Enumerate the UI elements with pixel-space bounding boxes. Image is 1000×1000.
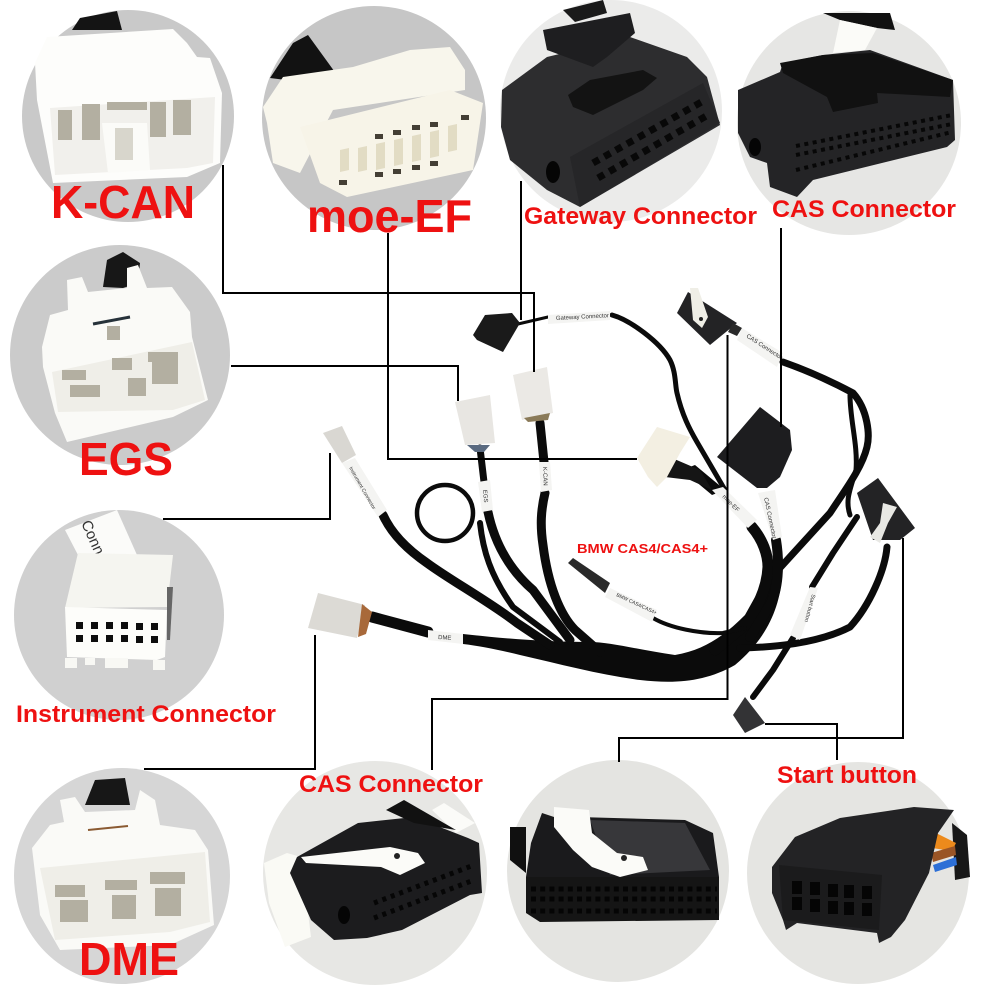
tag: BMW CAS4: BMW CAS4/CAS4+ <box>615 592 658 616</box>
wiring harness <box>308 288 915 733</box>
panel: CAS connector top <box>737 11 961 235</box>
tag: start button: Start button <box>803 593 816 623</box>
K-CAN label: K-CAN <box>51 176 195 228</box>
wire: DME <box>372 617 428 632</box>
wire: instrument <box>383 515 550 645</box>
panel: CAS connector bottom left <box>263 761 487 985</box>
EGS label: EGS <box>79 433 173 485</box>
panel: CAS connector bottom middle <box>507 760 729 982</box>
wire: CAS upper right <box>778 362 868 570</box>
wire: start button upper <box>812 517 857 587</box>
tag: BMW CAS4 <box>605 588 658 622</box>
wire: moe-EF fan <box>682 465 725 495</box>
plug: moe-EF <box>637 427 712 490</box>
wire: gateway plug tail <box>518 317 548 324</box>
tag: EGS <box>478 480 493 512</box>
Gateway Connector label: Gateway Connector <box>524 203 757 230</box>
tag: DME <box>428 630 463 644</box>
DME label: DME <box>79 933 179 985</box>
plug: start button <box>733 697 765 733</box>
tag: instrument <box>342 458 387 517</box>
tag: CAS <box>737 328 783 367</box>
tag: gateway <box>548 311 610 324</box>
wire: CAS upper right strand <box>848 395 856 515</box>
wire: gateway <box>612 315 725 490</box>
panel: moe-EF connector <box>262 6 486 242</box>
panel: Gateway connector <box>500 0 757 230</box>
wire: CAS connector <box>750 540 778 637</box>
plug: BMW CAS4 barrel <box>568 558 610 593</box>
tag: CAS: CAS Connector <box>745 334 783 361</box>
moe-EF label: moe-EF <box>307 190 472 242</box>
wire: moe-EF <box>715 527 768 650</box>
wire: EGS inner <box>480 523 560 642</box>
tag: gateway: Gateway Connector <box>556 313 609 322</box>
wire: BMW CAS4 <box>653 618 745 633</box>
BMW CAS4 label: BMW CAS4/CAS4+ <box>577 541 708 556</box>
wire: EGS top <box>480 448 484 482</box>
panel: EGS connector <box>10 245 230 485</box>
tag: DME: DME <box>438 635 452 642</box>
plug: right black with latch <box>857 478 915 543</box>
wire: EGS outer <box>488 512 570 640</box>
plug: K-CAN <box>513 367 553 422</box>
leader lines <box>144 165 903 770</box>
panel: K-CAN connector <box>22 10 234 228</box>
wire: start button lower <box>753 638 793 697</box>
wire loop <box>417 485 473 541</box>
tag: moe-EF <box>712 487 757 528</box>
panel: Instrument connector <box>14 510 276 728</box>
harness trunk <box>463 570 782 682</box>
plug: CAS with white latch <box>677 288 742 345</box>
panel: DME connector <box>14 768 230 985</box>
tag: start button <box>790 587 818 640</box>
tag: vertical CAS: CAS Connector <box>762 497 777 539</box>
CAS Connector label: CAS Connector <box>772 196 956 223</box>
plug: DME <box>308 593 372 638</box>
CAS Connector label bottom: CAS Connector <box>299 771 483 798</box>
tag: vertical CAS <box>758 490 782 540</box>
tag: K-CAN <box>539 462 552 492</box>
tag: instrument: Instrument Connector <box>347 466 377 511</box>
wire: K-CAN <box>540 423 600 652</box>
plug: EGS <box>455 395 495 452</box>
plug: instrument <box>323 426 356 463</box>
panel: Start button connector <box>747 762 970 984</box>
plug: gateway <box>473 313 520 352</box>
Instrument Connector label: Instrument Connector <box>16 701 276 728</box>
wire: right plug <box>740 547 887 648</box>
plug: large black CAS <box>717 407 792 488</box>
tag: K-CAN: K-CAN <box>541 467 548 486</box>
Start button label: Start button <box>777 762 917 789</box>
panel: Instrument connector: Connect <box>77 518 116 576</box>
tag: EGS: EGS <box>481 490 488 503</box>
tag: moe-EF: moe-EF <box>721 494 740 514</box>
